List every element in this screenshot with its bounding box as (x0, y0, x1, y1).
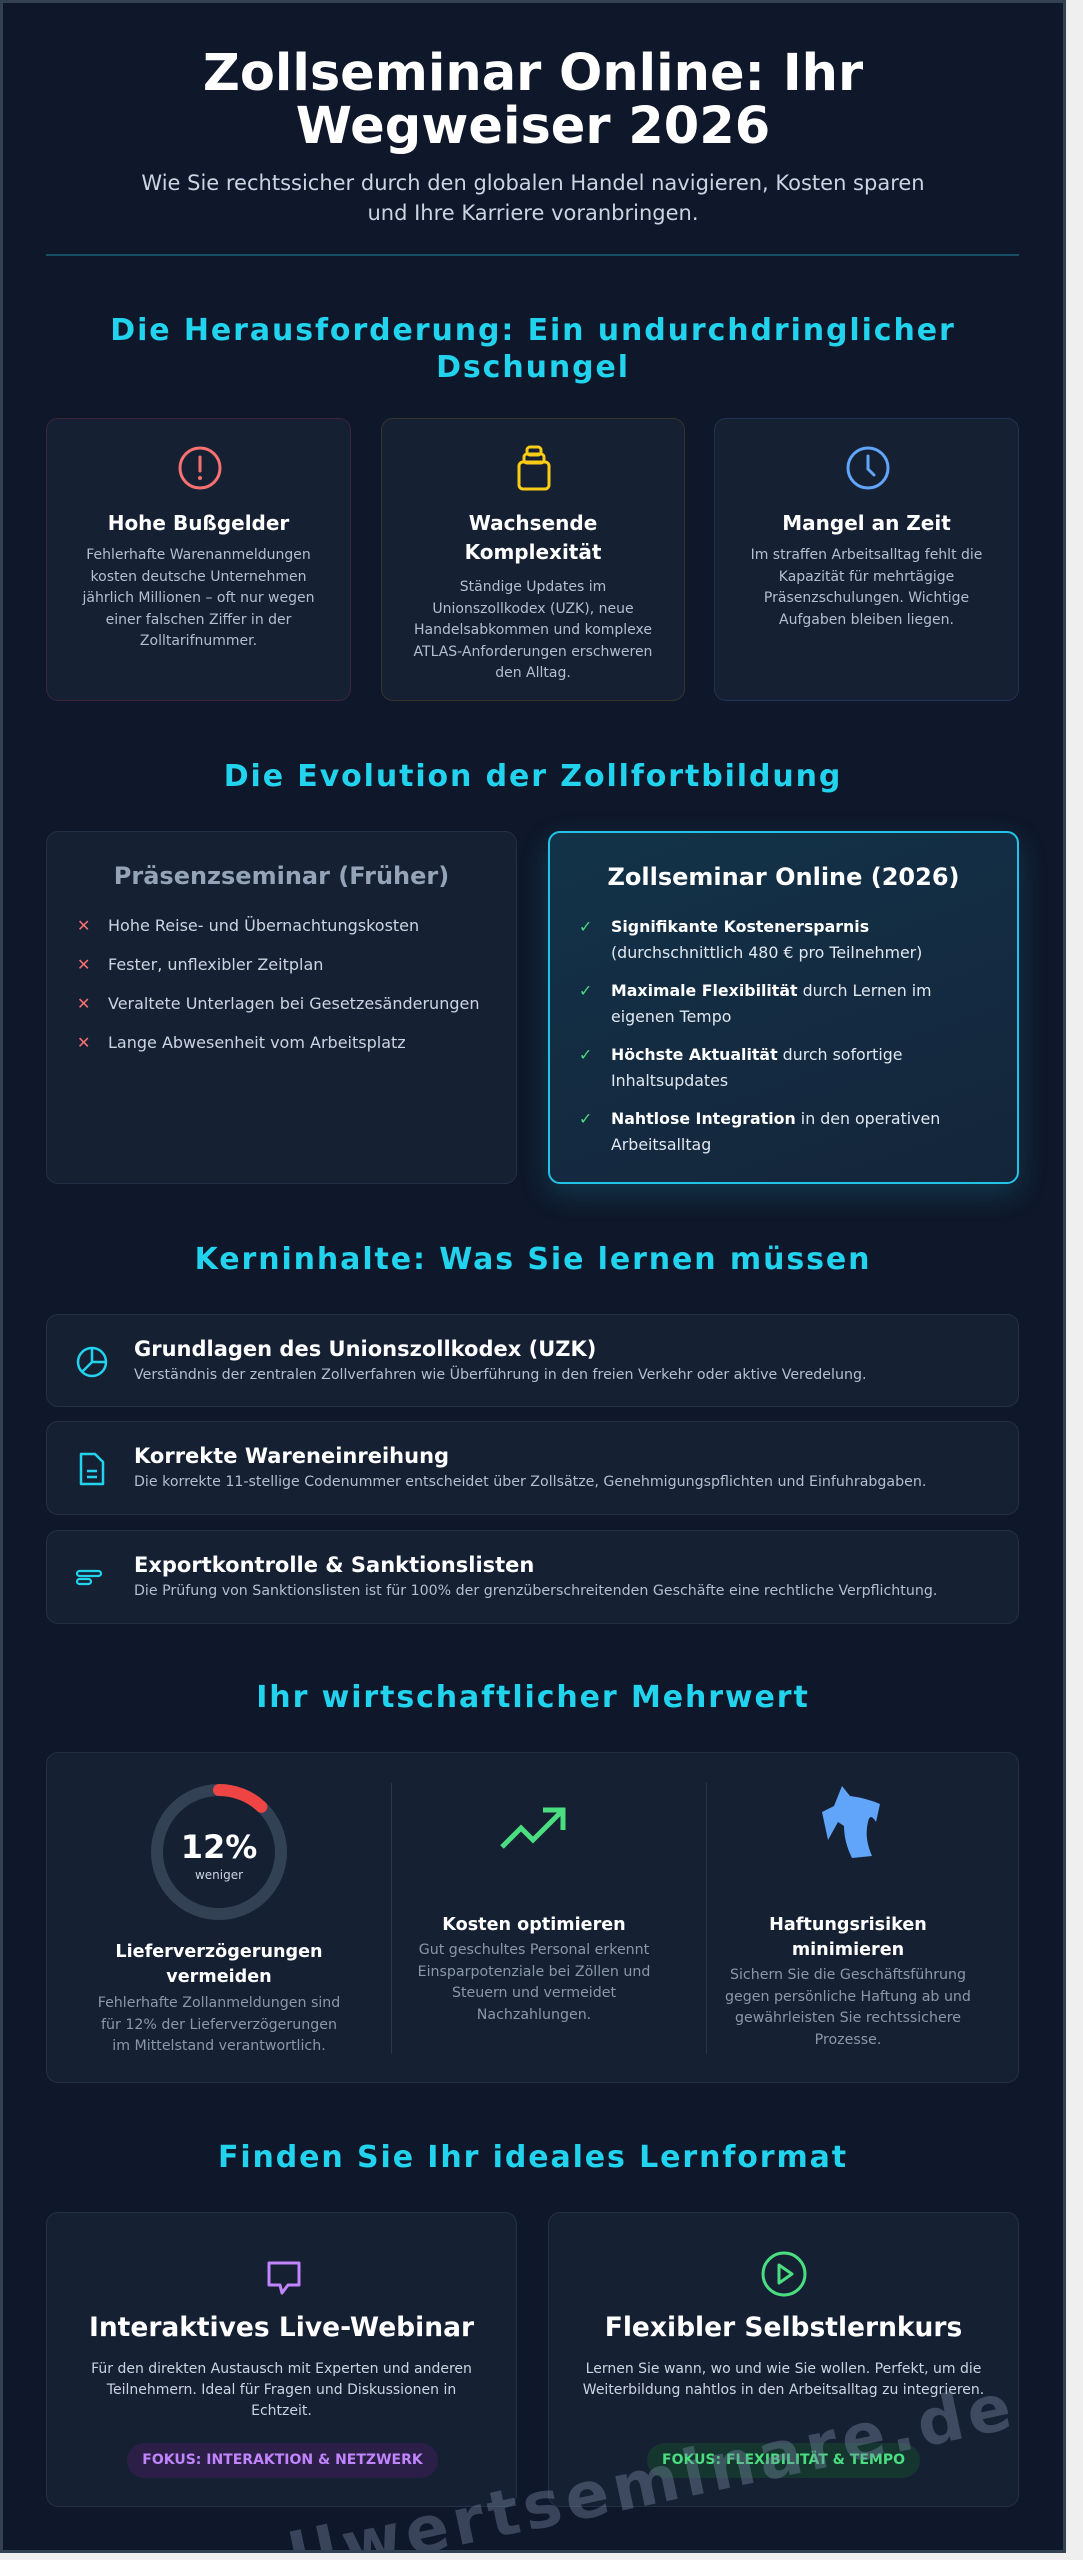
heading: Lernformat: Finden Sie Ihr ideales Lernformat (218, 2140, 848, 2175)
donut chart 12%: weniger (195, 1868, 243, 1882)
text (725, 1967, 971, 2048)
list: cons: Veraltete Unterlagen bei Gesetzesänderungen (108, 994, 479, 1013)
heading: Mehrwert: Ihr wirtschaftlicher Mehrwert (256, 1680, 810, 1715)
card title: Komplexität (465, 540, 601, 564)
card title: Wachsende (469, 511, 597, 535)
card text: Unionszollkodex (UZK), neue (432, 600, 634, 616)
text: Lernen Sie wann, wo und wie Sie wollen. Perfekt, um die (586, 2361, 981, 2377)
subtitle: und Ihre Karriere voranbringen. (367, 201, 699, 225)
card title (465, 511, 601, 564)
panel title: Präsenzseminar (Früher) (114, 862, 449, 890)
row title: Exportkontrolle & Sanktionslisten (134, 1553, 534, 1577)
icon: pie (76, 1346, 108, 1378)
title (115, 1942, 323, 1987)
list: pros: Höchste Aktualität durch sofortige (611, 1045, 903, 1064)
title: minimieren (792, 1940, 904, 1960)
title (769, 1915, 927, 1960)
list: cons: Lange Abwesenheit vom Arbeitsplatz (108, 1033, 406, 1052)
row: UZK (46, 1314, 1019, 1407)
row text: Verständnis der zentralen Zollverfahren wie Überführung in den freien Verkehr oder aktive Veredelung. (134, 1367, 866, 1383)
title: Haftungsrisiken (769, 1915, 927, 1935)
card: Hohe Bußgelder (46, 418, 351, 701)
badge: FOKUS: FLEXIBILITÄT & TEMPO (662, 2452, 905, 2468)
list: pros: (durchschnittlich 480 € pro Teilnehmer) (611, 942, 922, 962)
list: pros: Nahtlose Integration in den operativen (611, 1109, 940, 1128)
title: vermeiden (166, 1967, 272, 1987)
card text: Präsenzschulungen. Wichtige (764, 590, 969, 606)
badge: FOKUS: INTERAKTION & NETZWERK (142, 2452, 423, 2468)
title: Kosten optimieren (442, 1915, 626, 1935)
list: pros: ✓ (579, 1045, 592, 1064)
title (203, 44, 863, 156)
text: Steuern und vermeidet (452, 1985, 616, 2001)
card text: Ständige Updates im (460, 579, 606, 595)
text: Weiterbildung nahtlos in den Arbeitsalltag zu integrieren. (583, 2382, 984, 2398)
text: im Mittelstand verantwortlich. (112, 2038, 326, 2054)
text (583, 2361, 984, 2398)
icon: alert (178, 446, 222, 490)
row: Wareneinreihung (46, 1421, 1019, 1515)
row text: Die korrekte 11-stellige Codenummer entscheidet über Zollsätze, Genehmigungspflichten und Einfuhrabgaben. (134, 1474, 926, 1490)
text: für 12% der Lieferverzögerungen (101, 2016, 337, 2032)
list: pros: ✓ (579, 1109, 592, 1128)
title: Interaktives Live-Webinar (89, 2312, 474, 2343)
list: cons: ✕ (77, 994, 90, 1013)
icon: play (762, 2252, 806, 2296)
text: Prozesse. (815, 2032, 881, 2048)
card text: Im straffen Arbeitsalltag fehlt die (751, 547, 982, 563)
title: Wegweiser 2026 (296, 97, 770, 156)
column: Lieferverzögerungen (98, 1784, 340, 2054)
icon: shield shape (822, 1786, 880, 1858)
icon: file (80, 1452, 104, 1486)
heading: Kerninhalte: Kerninhalte: Was Sie lernen müssen (195, 1242, 871, 1277)
text: Gut geschultes Personal erkennt (419, 1942, 649, 1958)
badge (127, 2443, 438, 2478)
list: pros: ✓ (579, 917, 592, 936)
card: Live-Webinar (46, 2212, 517, 2507)
text: gewährleisten Sie rechtssichere (735, 2010, 961, 2026)
donut chart 12% (151, 1784, 287, 1920)
heading: challenge (110, 313, 956, 385)
heading: evolution: Die Evolution der Zollfortbildung (224, 759, 842, 794)
heading: challenge: Dschungel (436, 350, 630, 385)
card title: Mangel an Zeit (782, 511, 951, 535)
text: Echtzeit. (251, 2403, 312, 2419)
row title: Korrekte Wareneinreihung (134, 1444, 449, 1468)
heading: challenge: Die Herausforderung: Ein undurchdringlicher (110, 313, 956, 348)
card text (414, 579, 652, 681)
text: Einsparpotenziale bei Zöllen und (418, 1964, 650, 1980)
text: Sichern Sie die Geschäftsführung (730, 1967, 966, 1983)
list: cons (77, 916, 479, 1052)
list: pros: Signifikante Kostenersparnis (611, 917, 869, 936)
text: Für den direkten Austausch mit Experten und anderen (91, 2361, 472, 2377)
panel: Mehrwert (46, 1752, 1019, 2083)
card text (751, 547, 982, 628)
card text: Handelsabkommen und komplexe (414, 622, 652, 638)
list: cons: Fester, unflexibler Zeitplan (108, 955, 323, 974)
icon: stack (518, 446, 550, 490)
card text: Fehlerhafte Warenanmeldungen (86, 547, 311, 563)
donut chart 12%: 12% (181, 1828, 257, 1866)
title: Flexibler Selbstlernkurs (605, 2312, 962, 2343)
text (98, 1995, 340, 2054)
panel: challenge cards (46, 418, 1019, 701)
card text: den Alltag. (495, 665, 571, 681)
subtitle (141, 171, 925, 225)
list: pros: Arbeitsalltag (611, 1134, 711, 1154)
card: Zeit (714, 418, 1019, 701)
card text: jährlich Millionen – oft nur wegen (83, 590, 314, 606)
title: Lieferverzögerungen (115, 1942, 323, 1962)
subtitle: Wie Sie rechtssicher durch den globalen Handel navigieren, Kosten sparen (141, 171, 925, 195)
card text: Zolltarifnummer. (140, 633, 257, 649)
list: pros: eigenen Tempo (611, 1006, 731, 1026)
card title: Hohe Bußgelder (108, 511, 289, 535)
text: Fehlerhafte Zollanmeldungen sind (98, 1995, 340, 2011)
card text: kosten deutsche Unternehmen (91, 568, 306, 584)
row: Exportkontrolle (46, 1530, 1019, 1624)
icon: trend up (500, 1808, 566, 1849)
list: pros (579, 917, 940, 1154)
card text: einer falschen Ziffer in der (106, 612, 291, 628)
text (91, 2361, 472, 2419)
row title: Grundlagen des Unionszollkodex (UZK) (134, 1337, 596, 1361)
list: cons: Hohe Reise- und Übernachtungskosten (108, 916, 419, 935)
card: Selbstlernkurs (548, 2212, 1019, 2507)
card: Komplexität (381, 418, 685, 701)
panel: Zollseminar Online (548, 831, 1019, 1184)
row text: Die Prüfung von Sanktionslisten ist für 100% der grenzüberschreitenden Geschäfte eine rechtliche Verpflichtung. (134, 1583, 937, 1599)
text (418, 1942, 650, 2022)
list: cons: ✕ (77, 916, 90, 935)
card text: Aufgaben bleiben liegen. (779, 612, 954, 628)
list: pros: ✓ (579, 981, 592, 1000)
list: pros: Inhaltsupdates (611, 1070, 728, 1090)
panel: Präsenzseminar (46, 831, 517, 1184)
list: cons: ✕ (77, 955, 90, 974)
text: gegen persönliche Haftung ab und (725, 1988, 971, 2004)
card text: Kapazität für mehrtägige (779, 568, 954, 584)
list: cons: ✕ (77, 1033, 90, 1052)
column: Kosten (418, 1808, 650, 2022)
title: Zollseminar Online: Ihr (203, 44, 863, 103)
text: Nachzahlungen. (477, 2006, 591, 2022)
badge (647, 2443, 920, 2478)
panel title: Zollseminar Online (2026) (607, 863, 960, 891)
text: Teilnehmern. Ideal für Fragen und Diskussionen in (107, 2382, 456, 2398)
card text: ATLAS-Anforderungen erschweren (414, 644, 652, 660)
list: pros: Maximale Flexibilität durch Lernen im (611, 981, 932, 1000)
icon: clock (846, 446, 890, 490)
column: Haftung (725, 1786, 971, 2048)
icon: chat (268, 2262, 300, 2295)
icon: bars (76, 1570, 102, 1586)
card text (82, 547, 314, 649)
